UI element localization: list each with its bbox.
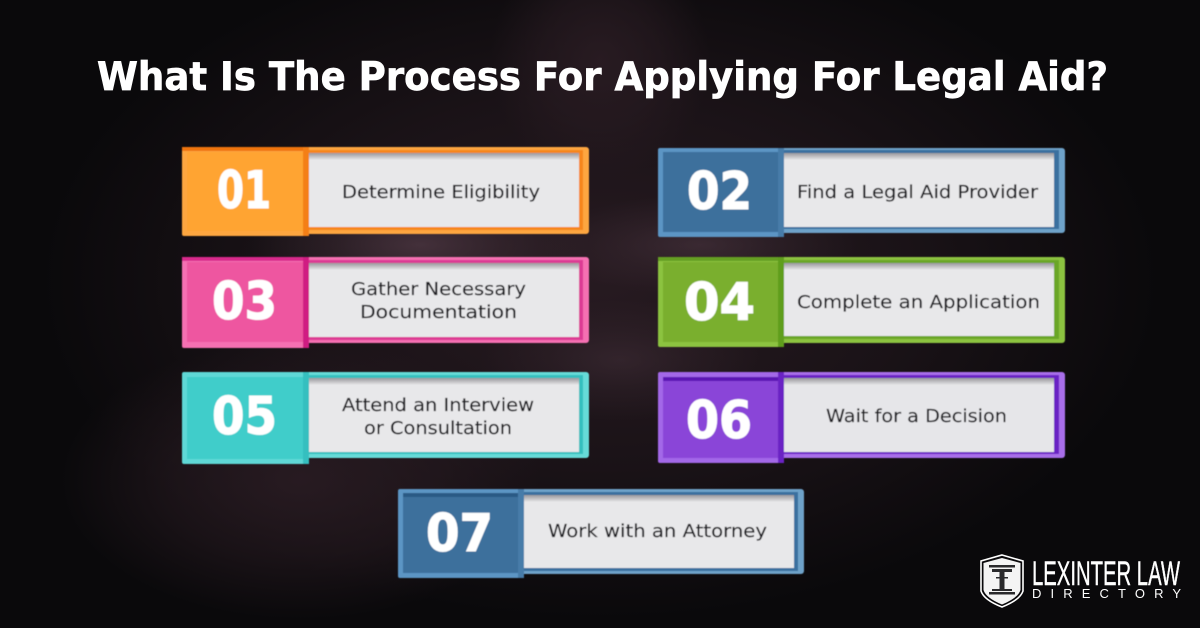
number box 07 — [398, 489, 524, 578]
label 03 — [351, 280, 526, 323]
number box 03 — [182, 257, 309, 348]
number box 01 — [182, 147, 309, 236]
label 05: or Consultation — [364, 419, 512, 439]
card 05: Attend an Interview or Consultation — [182, 372, 589, 464]
card 04: Complete an Application — [658, 257, 1065, 347]
number box 06 — [658, 372, 784, 463]
title: What Is The Process For Applying For Legal Aid? — [97, 54, 1108, 100]
number box 02 — [658, 148, 784, 237]
number box 05 — [182, 372, 309, 464]
card 07: Work with an Attorney — [398, 489, 804, 578]
card 03: Gather Necessary Documentation — [182, 257, 589, 348]
number box 02: 02 — [687, 162, 752, 222]
card 02: Find a Legal Aid Provider — [658, 148, 1065, 237]
label 07: Work with an Attorney — [548, 522, 767, 542]
label 05: Attend an Interview — [342, 396, 534, 416]
number box 06: 06 — [686, 391, 752, 451]
icon: shield with column — [981, 555, 1023, 607]
logo: Lexinter Law Directory — [981, 555, 1181, 607]
label 03: Documentation — [360, 303, 517, 323]
number box 07: 07 — [426, 504, 493, 564]
number box 04 — [658, 257, 784, 347]
card 01: Determine Eligibility — [182, 147, 589, 236]
number box 01: 01 — [217, 161, 271, 221]
logo subtitle: DIRECTORY — [1032, 586, 1181, 601]
card 06: Wait for a Decision — [658, 372, 1065, 463]
label 05 — [342, 396, 534, 439]
label 01: Determine Eligibility — [342, 183, 540, 203]
label 06: Wait for a Decision — [826, 407, 1007, 427]
number box 05: 05 — [212, 387, 277, 447]
number box 04: 04 — [684, 273, 755, 333]
label 03: Gather Necessary — [351, 280, 526, 300]
number box 03: 03 — [212, 272, 277, 332]
label 02: Find a Legal Aid Provider — [797, 183, 1039, 203]
label 04: Complete an Application — [797, 293, 1040, 313]
